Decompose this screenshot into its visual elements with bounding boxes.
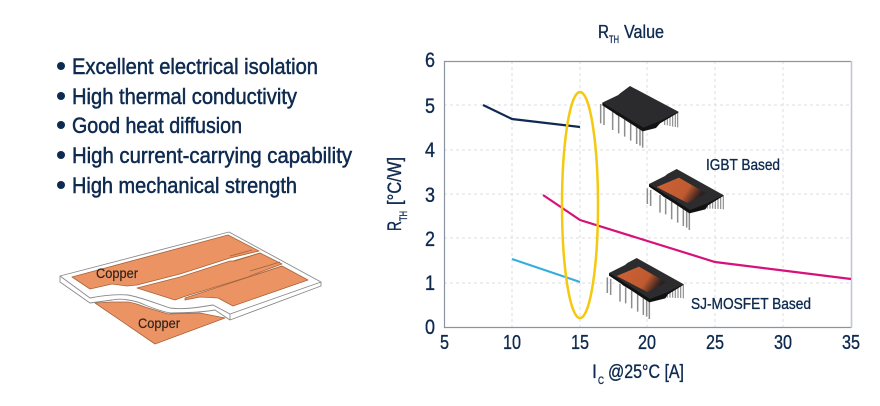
chart title: Value xyxy=(624,22,664,42)
y axis tick labels: 1 xyxy=(425,272,435,295)
series: magenta line xyxy=(543,195,851,279)
y axis label xyxy=(385,157,410,231)
axes xyxy=(444,62,851,328)
x axis label: @25°C [A] xyxy=(608,362,684,383)
series: cyan line xyxy=(512,259,580,282)
board edge lines xyxy=(60,276,321,320)
series: navy line xyxy=(483,105,580,127)
chip: black module xyxy=(601,86,678,148)
y axis tick labels: 5 xyxy=(425,95,435,118)
x axis label: I xyxy=(592,362,597,383)
bullet: high thermal conductivity: High thermal conductivity xyxy=(72,84,297,109)
copper lead slits xyxy=(230,250,282,275)
y axis tick labels: 4 xyxy=(425,139,435,162)
x axis tick labels: 30 xyxy=(774,332,792,354)
grid xyxy=(444,61,851,327)
x axis tick labels xyxy=(440,332,860,354)
y axis tick labels: 0 xyxy=(425,316,435,339)
copper pad: centre xyxy=(137,253,282,300)
chip: orange window module, SJ-MOSFET xyxy=(607,258,683,319)
label: SJ-MOSFET based: SJ-MOSFET Based xyxy=(691,296,811,313)
y axis label: [°C/W] xyxy=(385,157,406,205)
y axis label: R xyxy=(385,221,406,231)
y axis tick labels: 3 xyxy=(425,184,435,207)
x axis tick labels: 20 xyxy=(638,332,656,354)
label: copper lower: Copper xyxy=(138,315,180,331)
label: IGBT based: IGBT Based xyxy=(706,157,780,174)
bullet: high current-carrying capability: High current-carrying capability xyxy=(72,143,352,168)
x axis tick labels: 35 xyxy=(842,332,860,354)
chart title: TH xyxy=(609,34,619,46)
x axis label xyxy=(592,362,684,387)
y axis tick labels: 2 xyxy=(425,228,435,251)
chart title xyxy=(598,22,664,46)
x axis label: C xyxy=(598,375,604,387)
bullet: good heat diffusion: Good heat diffusion xyxy=(72,113,242,138)
copper pad: right xyxy=(185,266,308,306)
ceramic board upper section xyxy=(60,232,321,320)
x axis tick labels: 25 xyxy=(706,332,724,354)
y axis label: TH xyxy=(398,211,410,221)
x axis tick labels: 10 xyxy=(503,332,521,354)
chart title: R xyxy=(598,22,609,42)
bullet list xyxy=(57,54,352,198)
highlight ellipse xyxy=(562,92,598,318)
copper pad: top left xyxy=(72,235,259,289)
y axis tick labels: 6 xyxy=(425,49,435,72)
copper pad: bottom xyxy=(95,302,225,344)
label: copper upper: Copper xyxy=(96,265,138,281)
y axis tick labels xyxy=(425,49,435,339)
chip: orange window module, IGBT xyxy=(647,169,723,230)
x axis tick labels: 5 xyxy=(440,332,449,354)
line chart xyxy=(385,49,860,387)
bullet: high mechanical strength: High mechanical strength xyxy=(72,173,297,198)
copper substrate diagram xyxy=(60,232,321,344)
x axis tick labels: 15 xyxy=(571,332,589,354)
bullet: excellent electrical isolation: Excellent electrical isolation xyxy=(72,54,318,79)
